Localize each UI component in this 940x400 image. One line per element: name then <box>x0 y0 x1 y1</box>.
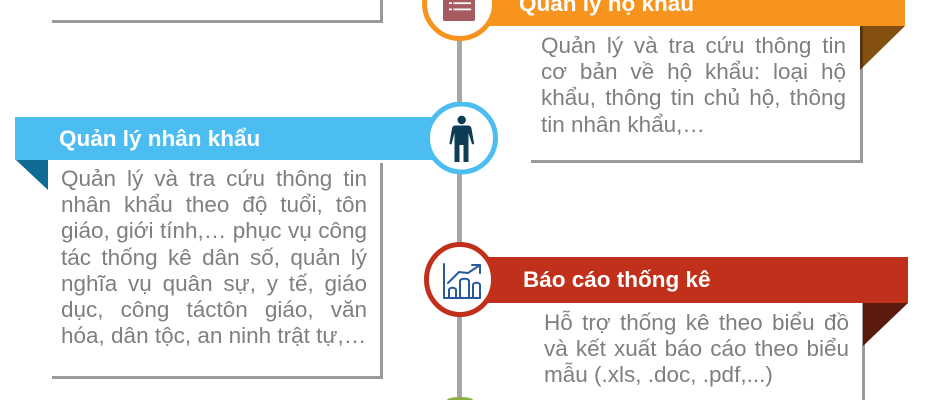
description <box>544 310 849 387</box>
description: dục, công táctôn giáo, văn <box>61 297 367 322</box>
card frame <box>531 60 863 163</box>
description: nghĩa vụ quân sự, y tế, giáo <box>61 271 367 296</box>
card frame <box>52 163 383 379</box>
icon circle: next step green <box>447 397 473 400</box>
panel: quan ly nhan khau <box>15 102 498 379</box>
description: cơ bản về hộ khẩu: loại hộ <box>541 59 846 84</box>
description <box>61 166 367 348</box>
heading: Quản lý nhân khẩu <box>59 126 260 151</box>
card frame <box>862 300 865 400</box>
red banner <box>480 257 908 303</box>
description: giáo, giới tính,… phục vụ công <box>61 218 367 243</box>
panel: quan ly ho khau <box>422 0 905 163</box>
icon circle: chart <box>424 242 491 317</box>
timeline vertical line <box>457 0 462 400</box>
description: hóa, dân tộc, an ninh trật tự,… <box>61 323 366 348</box>
banner fold <box>863 303 908 346</box>
description: nhân khẩu theo độ tuổi, tôn <box>61 192 367 217</box>
description: tác thống kê dân số, quản lý <box>61 245 367 270</box>
description: Quản lý và tra cứu thông tin <box>541 33 846 58</box>
description: và kết xuất báo cáo theo biểu <box>544 336 849 361</box>
description: Quản lý và tra cứu thông tin <box>61 166 367 191</box>
blue banner <box>15 117 435 160</box>
panel: top left card frame <box>52 0 383 23</box>
panel: bao cao thong ke <box>424 242 908 400</box>
description <box>541 33 846 137</box>
description: tin nhân khẩu,… <box>541 112 705 137</box>
icon circle <box>422 0 492 41</box>
description: Hỗ trợ thống kê theo biểu đồ <box>544 310 849 335</box>
description: mẫu (.xls, .doc, .pdf,...) <box>544 362 773 387</box>
banner fold <box>860 26 905 70</box>
banner fold <box>16 160 48 190</box>
heading: Báo cáo thống kê <box>523 267 711 292</box>
orange banner <box>480 0 905 26</box>
description: khẩu, thông tin chủ hộ, thông <box>541 85 846 110</box>
icon circle: person <box>430 102 498 174</box>
